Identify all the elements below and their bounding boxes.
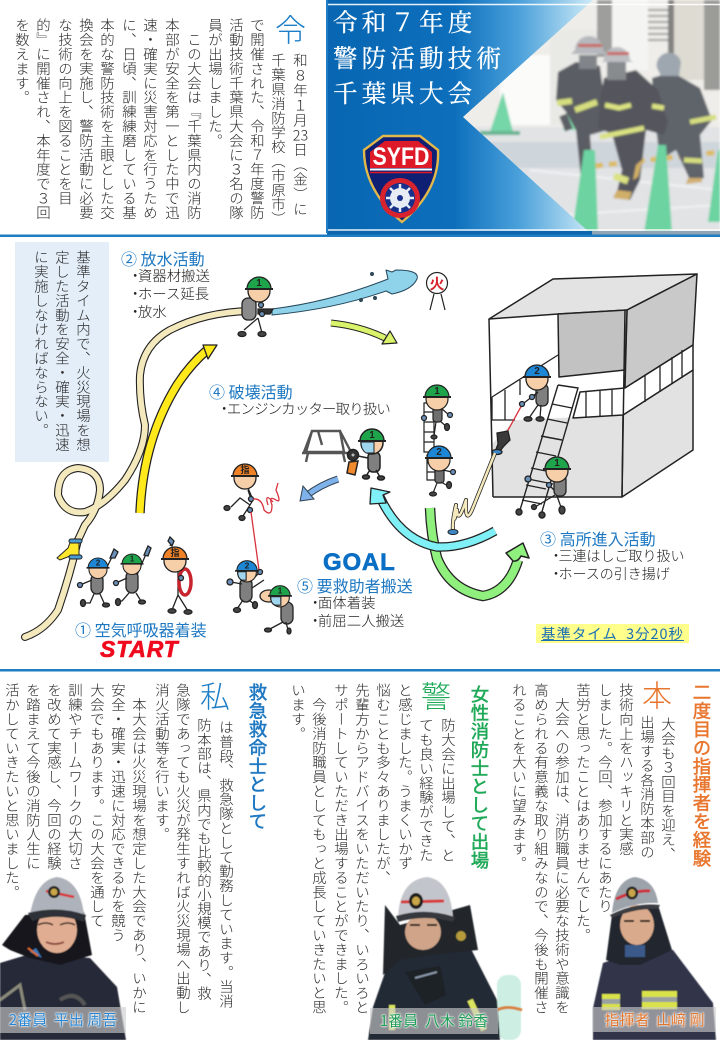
large initial: 警: 警 [414, 681, 458, 711]
text block: introduction: 換会を実施し、警防活動に必要 [76, 18, 97, 220]
note box: standard time explanation: 定した活動を安全・確実・迅速 [52, 250, 73, 452]
hose coupling [57, 539, 82, 560]
text block: introduction: この大会は『千葉県内の消防 [184, 32, 205, 220]
firefighter: balcony hauling: 2 [534, 366, 540, 377]
text block: commander story: 苦労と思ったことはありませんでした。 [573, 683, 594, 942]
firefighter: ground at ladder: 1 [554, 458, 560, 469]
hauled hose [448, 453, 495, 534]
title: 令和７年度 警防活動技術 千葉県大会 [333, 4, 505, 110]
text block: paramedic story: 大会でもあります。この大会を通して [87, 683, 108, 928]
firefighter: nozzle operator [238, 277, 273, 336]
emblem: SYFD shield [364, 136, 438, 222]
text block: paramedic story: 本大会は火災現場を想定した大会であり、いかに [129, 697, 150, 1014]
three-section ladder [516, 385, 578, 518]
label: step 2 water discharge: ・資器材搬送 ・ホース延長 ・放水 [128, 265, 210, 322]
portrait: commander Yamazaki [592, 876, 717, 1040]
firefighter: ground at ladder [525, 457, 571, 514]
label: step 1 breathing apparatus: ① 空気呼吸器着装 [75, 617, 207, 641]
masking-up firefighters at start: 2 [96, 558, 101, 567]
text block: paramedic story: 急隊であっても火災が発生すれば火災現場へ出動し [173, 683, 194, 1014]
text block: paramedic story: を踏まえて今後の消防人生に [23, 683, 44, 870]
divider line [0, 669, 720, 672]
label: step 5 rescue: ・面体着装 ・前屈二人搬送 [308, 592, 404, 631]
firefighters climbing: 1 [434, 386, 440, 397]
label: step 5 rescue [297, 573, 413, 631]
text block: female firefighter story: います。 [288, 683, 309, 741]
green arrow [430, 508, 529, 596]
label: step 3 high access: ・三連はしご取り扱い ・ホースの引き揚げ [549, 546, 684, 584]
heading: female firefighter: 女性消防士として出場 [467, 685, 493, 869]
text block: female firefighter story [288, 681, 459, 1014]
cyan arrow [370, 488, 495, 547]
emblem: SYFD shield: SYFD [372, 143, 430, 171]
masking-up firefighters at start [78, 537, 192, 614]
note box: standard time explanation [15, 242, 109, 462]
breaking frame and engine cutter operator [302, 429, 386, 480]
rescue pair: 2 [245, 560, 250, 570]
large initial: 私: 私 [193, 681, 237, 711]
front cones [572, 150, 598, 233]
label: start: START [100, 636, 179, 662]
label: step 4 breaking: ・エンジンカッター取り扱い [217, 398, 390, 419]
text block: commander story: 技術向上をハッキリと実感 [616, 683, 637, 856]
breaking frame and engine cutter operator: 1 [369, 430, 375, 441]
text block: commander story: しました。今回、参加するにあたり [595, 683, 616, 913]
middle firefighter [598, 70, 668, 200]
callout: standard time: 基準タイム 3分20秒 [541, 623, 684, 644]
panel: activity flow diagram [21, 270, 698, 641]
portrait: firefighter Yagi [367, 876, 523, 1040]
label: step 5 rescue: ⑤ 要救助者搬送 [297, 573, 413, 597]
text block: female firefighter story: サポートしていただき出場することができました。 [331, 683, 352, 1014]
firefighters climbing [422, 385, 456, 496]
text block: paramedic story: 活かしていきたいと思いました。 [2, 683, 23, 899]
text block: female firefighter story: 悩むことも多々ありましたが、 [373, 683, 394, 885]
label: step 3 high access [540, 526, 684, 584]
label: step 4 breaking: ④ 破壊活動 [209, 379, 293, 403]
text block: paramedic story: 安全・確実・迅速に対応できるかを競う [108, 683, 129, 942]
decorative frame lines [0, 0, 720, 237]
text block: introduction: 和８年１月 23 日（金）に [290, 53, 311, 217]
commander with rope [224, 463, 279, 570]
text block: female firefighter story: 先輩方からアドバイスをいただいたり、いろいろと [352, 683, 373, 1014]
photo: firefighters running [460, 0, 720, 235]
firefighter: balcony hauling [492, 365, 551, 454]
back firefighter [652, 72, 712, 180]
text block: paramedic story: 訓練やチームワークの大切さ [65, 683, 86, 870]
text block: paramedic story: 防本部は、県内でも比較的小規模であり、救 [194, 718, 215, 1000]
text block: introduction [12, 14, 313, 226]
label: step 2 water discharge [121, 246, 210, 322]
name label: 2nd member [0, 1007, 126, 1033]
text block: commander story: 出場する各消防本部の [637, 715, 658, 859]
firefighters climbing: 2 [436, 447, 442, 458]
text block: paramedic story: は普段、救急隊として勤務しています。当消 [216, 720, 237, 1008]
text block: commander story: 高められる有意義な取り組みなので、今後も開催さ [531, 683, 552, 1014]
text block: commander story [509, 680, 679, 1014]
text block: paramedic story: を改めて実感し、今回の経験 [44, 683, 65, 870]
text block: introduction: で開催された、令和７年度警防 [247, 18, 268, 220]
text block: introduction: 千葉県消防学校（市原市） [268, 53, 289, 226]
name label: 1st member: 1番員 八木 鈴香 [380, 1010, 488, 1031]
text block: introduction: 活動技術千葉県大会に３名の隊 [226, 18, 247, 220]
text block: introduction: 速・確実に災害対応を行うため [140, 18, 161, 220]
name label: 1st member [370, 1008, 498, 1034]
heading: paramedic: 救急救命士として [245, 683, 271, 830]
heading: second-time commander: 二度目の指揮者を経験 [689, 683, 715, 867]
text block: commander story: 大会への参加は、消防職員に必要な技術や意識を [552, 697, 573, 1014]
yellow-green arrow [331, 323, 397, 344]
yellow arrow [140, 345, 217, 513]
text block: commander story: 大会も３回目を迎え、 [658, 717, 679, 861]
commander with rope: 指 [240, 463, 250, 476]
fire target [426, 272, 448, 310]
label: goal: GOAL [323, 549, 396, 576]
large initial: 令: 令 [268, 14, 313, 45]
firefighter: nozzle operator: 1 [256, 278, 262, 289]
text block: introduction: 的』に開催され、本年度で３回 [33, 18, 54, 220]
fire target: 火 [429, 273, 445, 294]
text block: introduction: に、日頃、訓練練磨している基 [119, 18, 140, 220]
rescue pair [227, 560, 293, 634]
label: step 4 breaking [209, 379, 390, 419]
blue gradient title band [327, 0, 593, 233]
text block: introduction: 員が出場しました。 [205, 18, 226, 148]
portrait: firefighter Hirade [0, 876, 127, 1040]
label: step 3 high access: ③ 高所進入活動 [540, 526, 656, 550]
text block: introduction: 本的な警防技術を主眼とした交 [97, 18, 118, 220]
rope [595, 152, 720, 166]
text block: paramedic story: 消火活動等を行います。 [152, 683, 173, 841]
text block: female firefighter story: ても良い経験ができた [416, 718, 437, 862]
text block: female firefighter story: 今後消防職員としてもっと成長していきたいと思 [309, 697, 330, 1014]
masking-up firefighters at start: 指 [170, 546, 180, 559]
text block: introduction: を数えます。 [12, 18, 33, 104]
panel: header banner with photo [327, 0, 720, 234]
fire hose with loop [25, 311, 250, 637]
note box: standard time explanation: 基準タイム内で、火災現場を想 [73, 250, 94, 452]
name label: 2nd member: 2番員 平出 周吾 [9, 1009, 117, 1030]
blue arrow [300, 479, 338, 501]
label: step 2 water discharge: ② 放水活動 [121, 246, 205, 270]
text block: female firefighter story: 防大会に出場して、と [438, 718, 459, 862]
text block: commander story: れることを大いに望みます。 [509, 683, 530, 870]
text block: paramedic story [2, 681, 237, 1014]
note box: standard time explanation: に実施しなければならない。 [31, 250, 52, 437]
building [489, 274, 697, 497]
text block: female firefighter story: と感じました。うまくいかず [395, 683, 416, 870]
large initial: 本: 本 [635, 680, 679, 710]
rescue pair: 1 [278, 585, 283, 595]
masking-up firefighters at start: 1 [130, 554, 135, 563]
water stream [272, 270, 417, 315]
text block: introduction: 本部が安全を第一とした中で迅 [162, 18, 183, 220]
name label: commander [593, 1007, 716, 1032]
left firefighter [556, 62, 608, 190]
text block: introduction: な技術の向上を図ることを目 [55, 18, 76, 205]
name label: commander: 指揮者 山﨑 剛 [604, 1009, 705, 1030]
